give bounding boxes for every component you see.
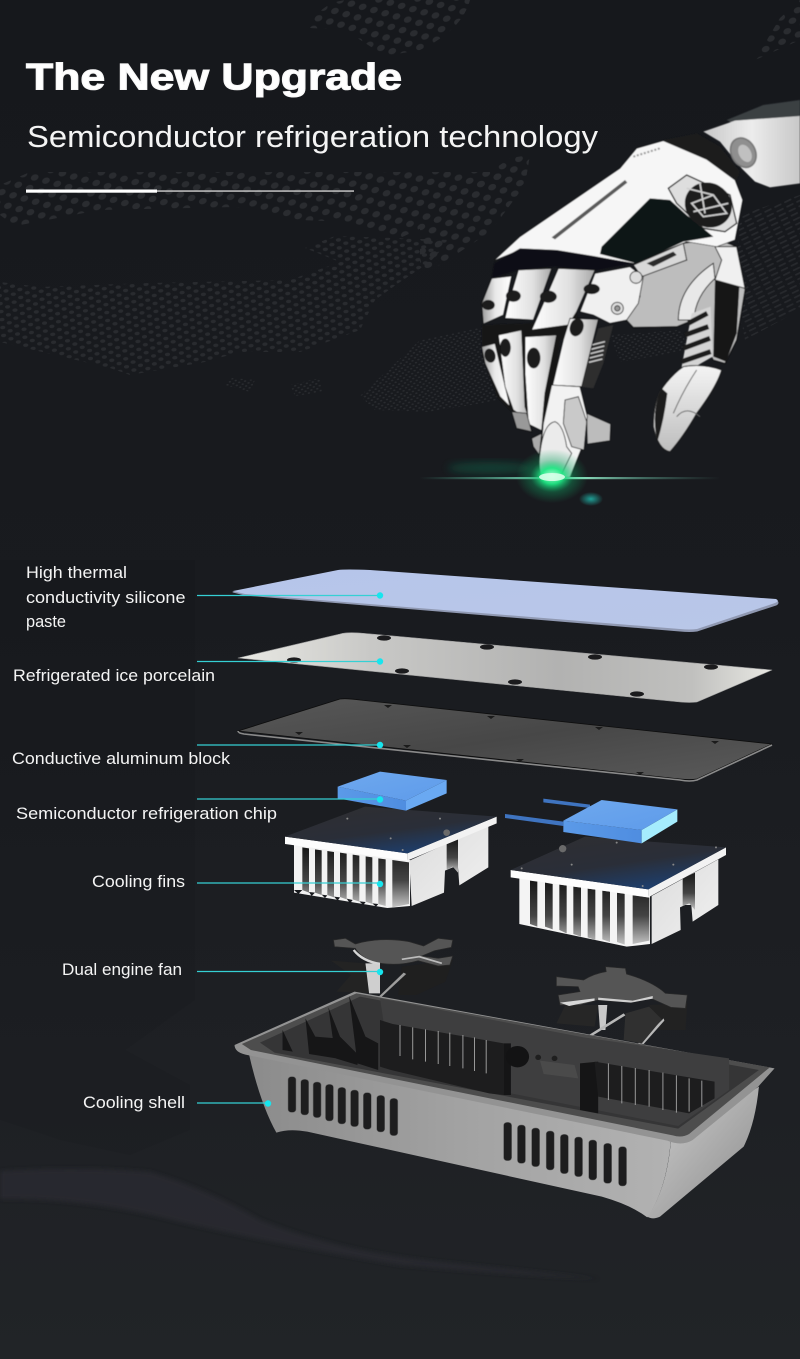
dark joint shadows	[482, 312, 580, 427]
palm side and thumb	[623, 238, 745, 452]
soft dark shadow column behind labels	[0, 560, 195, 1155]
cooling shell body	[235, 992, 775, 1218]
callout: ice porcelain	[13, 658, 383, 685]
callout: silicone paste: conductivity silicone	[26, 589, 186, 607]
heading divider	[26, 190, 354, 193]
green touch glow	[420, 449, 720, 506]
inner vent combs	[595, 1062, 715, 1113]
callout: dual engine fan	[62, 961, 383, 979]
fan left	[331, 938, 453, 1001]
callout: cooling shell: Cooling shell	[83, 1094, 185, 1112]
layer: silicone paste plate	[233, 570, 778, 632]
lower fingers	[482, 330, 557, 432]
callout: silicone paste: High thermal	[26, 564, 127, 582]
right heat sink and chip	[505, 799, 726, 947]
callout: cooling fins	[92, 873, 383, 891]
blue chip left	[338, 772, 447, 811]
callout: aluminum block	[12, 742, 383, 768]
bottom swoosh	[0, 1169, 600, 1279]
left heat sink and chip	[285, 772, 497, 908]
subtitle: Semiconductor refrigeration technology	[27, 119, 599, 154]
heat sink right	[511, 837, 726, 947]
hand lower: fingers	[482, 267, 643, 481]
left dividers	[283, 996, 598, 1113]
title: The New Upgrade	[26, 56, 402, 98]
callout: refrigeration chip	[16, 796, 383, 823]
callout: cooling fins: Cooling fins	[92, 873, 185, 891]
dotted world map background	[0, 0, 800, 412]
callout: aluminum block: Conductive aluminum block	[12, 750, 231, 768]
shell vents	[288, 1077, 627, 1186]
blue chip right	[505, 799, 677, 843]
layer: ice porcelain plate	[238, 633, 772, 702]
callout: refrigeration chip: Semiconductor refrigeration chip	[16, 805, 277, 823]
fans and cooling shell	[235, 938, 775, 1218]
callout: silicone paste: paste	[26, 613, 66, 631]
index finger	[532, 317, 611, 481]
callout: dual engine fan: Dual engine fan	[62, 961, 182, 979]
spring and mechanism	[580, 325, 613, 388]
callout: silicone paste	[26, 564, 383, 631]
callout: cooling shell	[83, 1094, 271, 1112]
callout: ice porcelain: Refrigerated ice porcelain	[13, 667, 215, 685]
hand upper: arm, back plate, palm, thumb	[492, 100, 800, 452]
connector details	[506, 1046, 529, 1067]
heat sink left	[285, 807, 497, 908]
knuckle finger blocks	[482, 267, 643, 330]
robotic hand illustration	[482, 100, 800, 481]
layer: aluminum block plate	[238, 699, 772, 781]
fan right	[556, 967, 687, 1044]
forearm	[663, 100, 800, 187]
hand back plate	[492, 141, 743, 278]
